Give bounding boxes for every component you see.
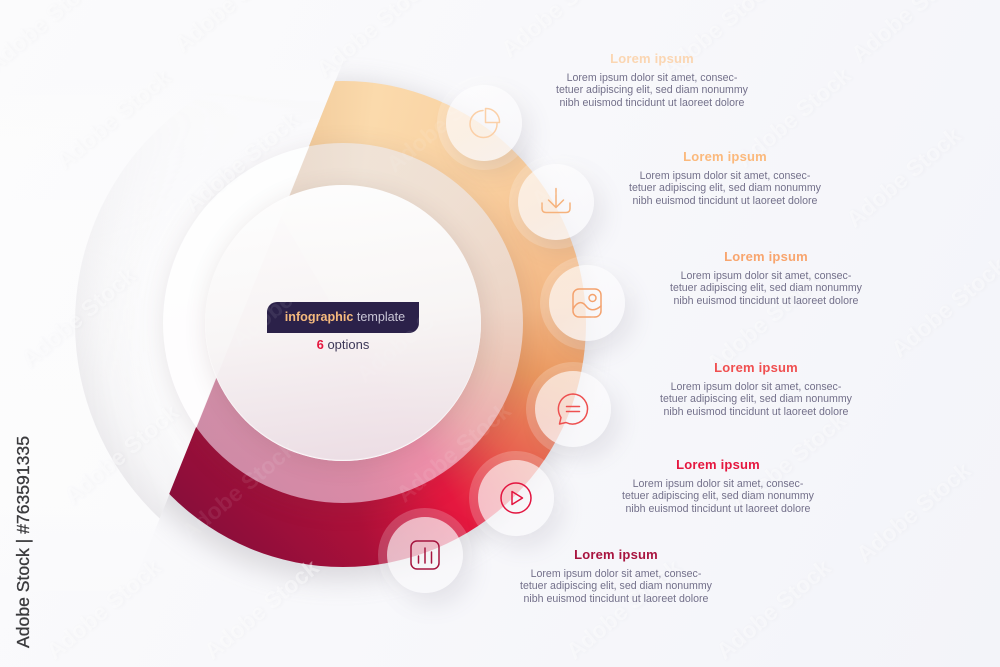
watermark layer: Adobe Stock (711, 554, 835, 664)
watermark layer: Adobe Stock (726, 407, 850, 517)
text block 5 (622, 457, 814, 515)
watermark layer: Adobe Stock (526, 102, 650, 212)
watermark layer: Adobe Stock (51, 64, 175, 174)
icon bubble: pie chart (446, 85, 522, 161)
icon bubble: chat (535, 371, 611, 447)
text block 4 (660, 360, 852, 418)
text block 5: Lorem ipsum (676, 457, 760, 472)
watermark layer: Adobe Stock (381, 67, 505, 177)
text block 4: Lorem ipsum dolor sit amet, consec- (671, 381, 841, 393)
text block 6: tetuer adipiscing elit, sed diam nonummy (520, 580, 712, 592)
text block 2: Lorem ipsum (683, 149, 767, 164)
icon bubble: bar chart (387, 517, 463, 593)
vertical stock id: Adobe Stock | #763591335 (13, 436, 33, 648)
watermark layer: Adobe Stock (516, 432, 640, 542)
main gradient ring clipped by diagonal (169, 81, 586, 567)
text block 3: tetuer adipiscing elit, sed diam nonummy (670, 282, 862, 294)
text block 5: nibh euismod tincidunt ut laoreet dolore (626, 503, 810, 515)
watermark layer: Adobe Stock (581, 222, 705, 332)
watermark layer: Adobe Stock (391, 397, 515, 507)
text block 2 (629, 149, 821, 207)
watermark layer: Adobe Stock (179, 107, 303, 217)
inner glass circle (205, 185, 481, 461)
text block 6: nibh euismod tincidunt ut laoreet dolore (524, 593, 708, 605)
center label: infographic template (267, 302, 419, 333)
middle circle white part left of diagonal (163, 146, 310, 428)
watermark layer: Adobe Stock (351, 277, 475, 387)
watermark layer: Adobe Stock (731, 62, 855, 172)
text block 6: Lorem ipsum dolor sit amet, consec- (531, 568, 701, 580)
watermark layer: Adobe Stock (16, 262, 140, 372)
watermark layer: Adobe Stock (41, 554, 165, 664)
watermark layer: Adobe Stock (701, 267, 825, 377)
watermark layer: Adobe Stock (199, 554, 323, 664)
text block 3: Lorem ipsum (724, 249, 808, 264)
center label: infographic template: infographic template (285, 310, 405, 324)
text block 5: tetuer adipiscing elit, sed diam nonummy (622, 490, 814, 502)
text block 1: nibh euismod tincidunt ut laoreet dolore (560, 97, 744, 109)
icon bubble: play (478, 460, 554, 536)
text block 6 (520, 547, 712, 605)
text block 1: Lorem ipsum (610, 51, 694, 66)
watermark layer: Adobe Stock (841, 122, 965, 232)
text block 4: tetuer adipiscing elit, sed diam nonummy (660, 393, 852, 405)
text block 2: nibh euismod tincidunt ut laoreet dolore (633, 195, 817, 207)
ring shadow (89, 82, 587, 580)
text block 3: Lorem ipsum dolor sit amet, consec- (681, 270, 851, 282)
middle glass circle (163, 143, 523, 503)
text block 1: tetuer adipiscing elit, sed diam nonummy (556, 84, 748, 96)
text block 1 (556, 51, 748, 109)
text block 2: tetuer adipiscing elit, sed diam nonummy (629, 182, 821, 194)
text block 5: Lorem ipsum dolor sit amet, consec- (633, 478, 803, 490)
text block 4: nibh euismod tincidunt ut laoreet dolore (664, 406, 848, 418)
watermark layer: Adobe Stock (59, 399, 183, 509)
icon bubble: image (549, 265, 625, 341)
text block 2: Lorem ipsum dolor sit amet, consec- (640, 170, 810, 182)
watermark layer: Adobe Stock (226, 242, 350, 352)
text block 4: Lorem ipsum (714, 360, 798, 375)
text block 3: nibh euismod tincidunt ut laoreet dolore (674, 295, 858, 307)
center label: 6 options: 6 options (317, 337, 369, 352)
watermark layer: Adobe Stock (851, 457, 975, 567)
glass panel left of diagonal (75, 242, 166, 518)
text block 6: Lorem ipsum (574, 547, 658, 562)
glass backdrop: diagonal panel and large arc (75, 74, 594, 588)
text block 1: Lorem ipsum dolor sit amet, consec- (567, 72, 737, 84)
icon bubble: download (518, 164, 594, 240)
watermark layer: Adobe Stock (561, 554, 685, 664)
text block 3 (670, 249, 862, 307)
watermark layer: Adobe Stock (176, 435, 300, 545)
